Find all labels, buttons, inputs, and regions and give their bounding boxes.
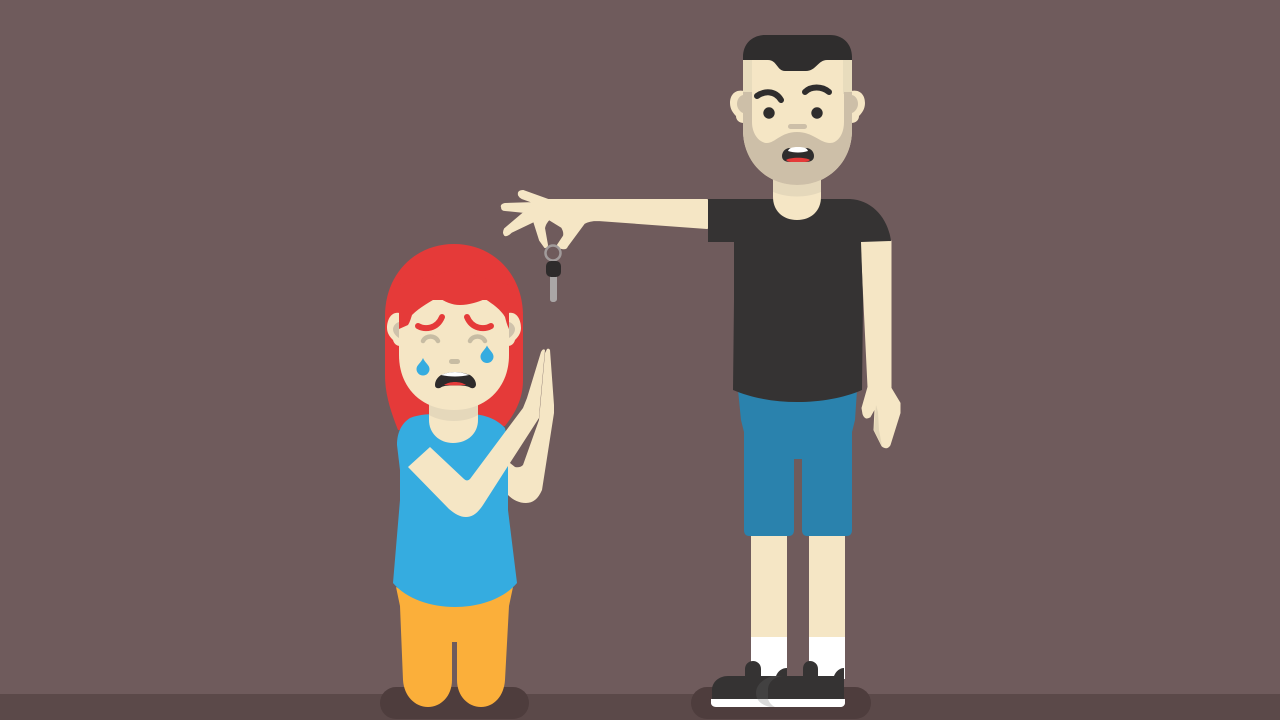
man hanging arm and hand	[861, 241, 900, 448]
woman nose	[449, 359, 460, 364]
man right shoe	[768, 661, 845, 707]
man nose	[788, 124, 807, 129]
woman right tear	[480, 346, 494, 363]
woman eyebrows	[418, 317, 491, 328]
man black t-shirt	[708, 199, 891, 402]
man outstretched arm and hand	[502, 191, 707, 248]
man face	[743, 60, 852, 185]
man mouth	[782, 147, 814, 162]
man ear shading	[737, 95, 858, 113]
man sideburn left	[743, 60, 752, 94]
woman ear shading	[393, 322, 515, 338]
shadow under man	[691, 687, 871, 719]
shoe overlap shadow	[756, 676, 790, 707]
man left leg	[751, 530, 787, 642]
figure: woman	[385, 244, 554, 707]
man sideburn right	[843, 60, 852, 94]
woman blue shirt	[393, 414, 517, 607]
man right leg	[809, 530, 845, 642]
woman near arm and hand	[408, 349, 545, 517]
man left ear	[730, 91, 744, 123]
woman hair back	[385, 244, 523, 430]
woman left tear	[416, 358, 430, 376]
woman far arm and hand	[508, 349, 554, 503]
woman neck shadow	[429, 400, 478, 421]
woman closed eyes	[423, 336, 485, 341]
man left eye	[763, 107, 775, 119]
man left shoe	[711, 661, 787, 707]
woman neck	[429, 400, 478, 443]
man finger shading	[874, 405, 882, 446]
woman mouth	[435, 372, 476, 388]
car keys	[546, 246, 561, 302]
key head	[546, 261, 561, 277]
man right eyebrow	[805, 88, 829, 92]
figure: man	[502, 35, 900, 707]
key ring	[546, 246, 560, 260]
man hair	[743, 35, 852, 71]
man beard	[743, 92, 852, 185]
woman left ear	[387, 313, 400, 346]
man right eye	[811, 107, 823, 119]
ground strip	[0, 694, 1280, 720]
man shorts	[738, 390, 857, 536]
man left sock	[751, 637, 787, 679]
man right sock	[809, 637, 845, 679]
key blade	[550, 275, 557, 302]
shadow under woman	[380, 687, 529, 719]
woman right ear	[508, 313, 521, 346]
woman fringe	[399, 270, 509, 329]
woman face	[399, 300, 509, 410]
man neck shadow	[773, 175, 821, 196]
man left eyebrow	[757, 92, 781, 100]
man neck	[773, 175, 821, 220]
woman trousers	[396, 587, 513, 707]
man right ear	[851, 91, 865, 123]
